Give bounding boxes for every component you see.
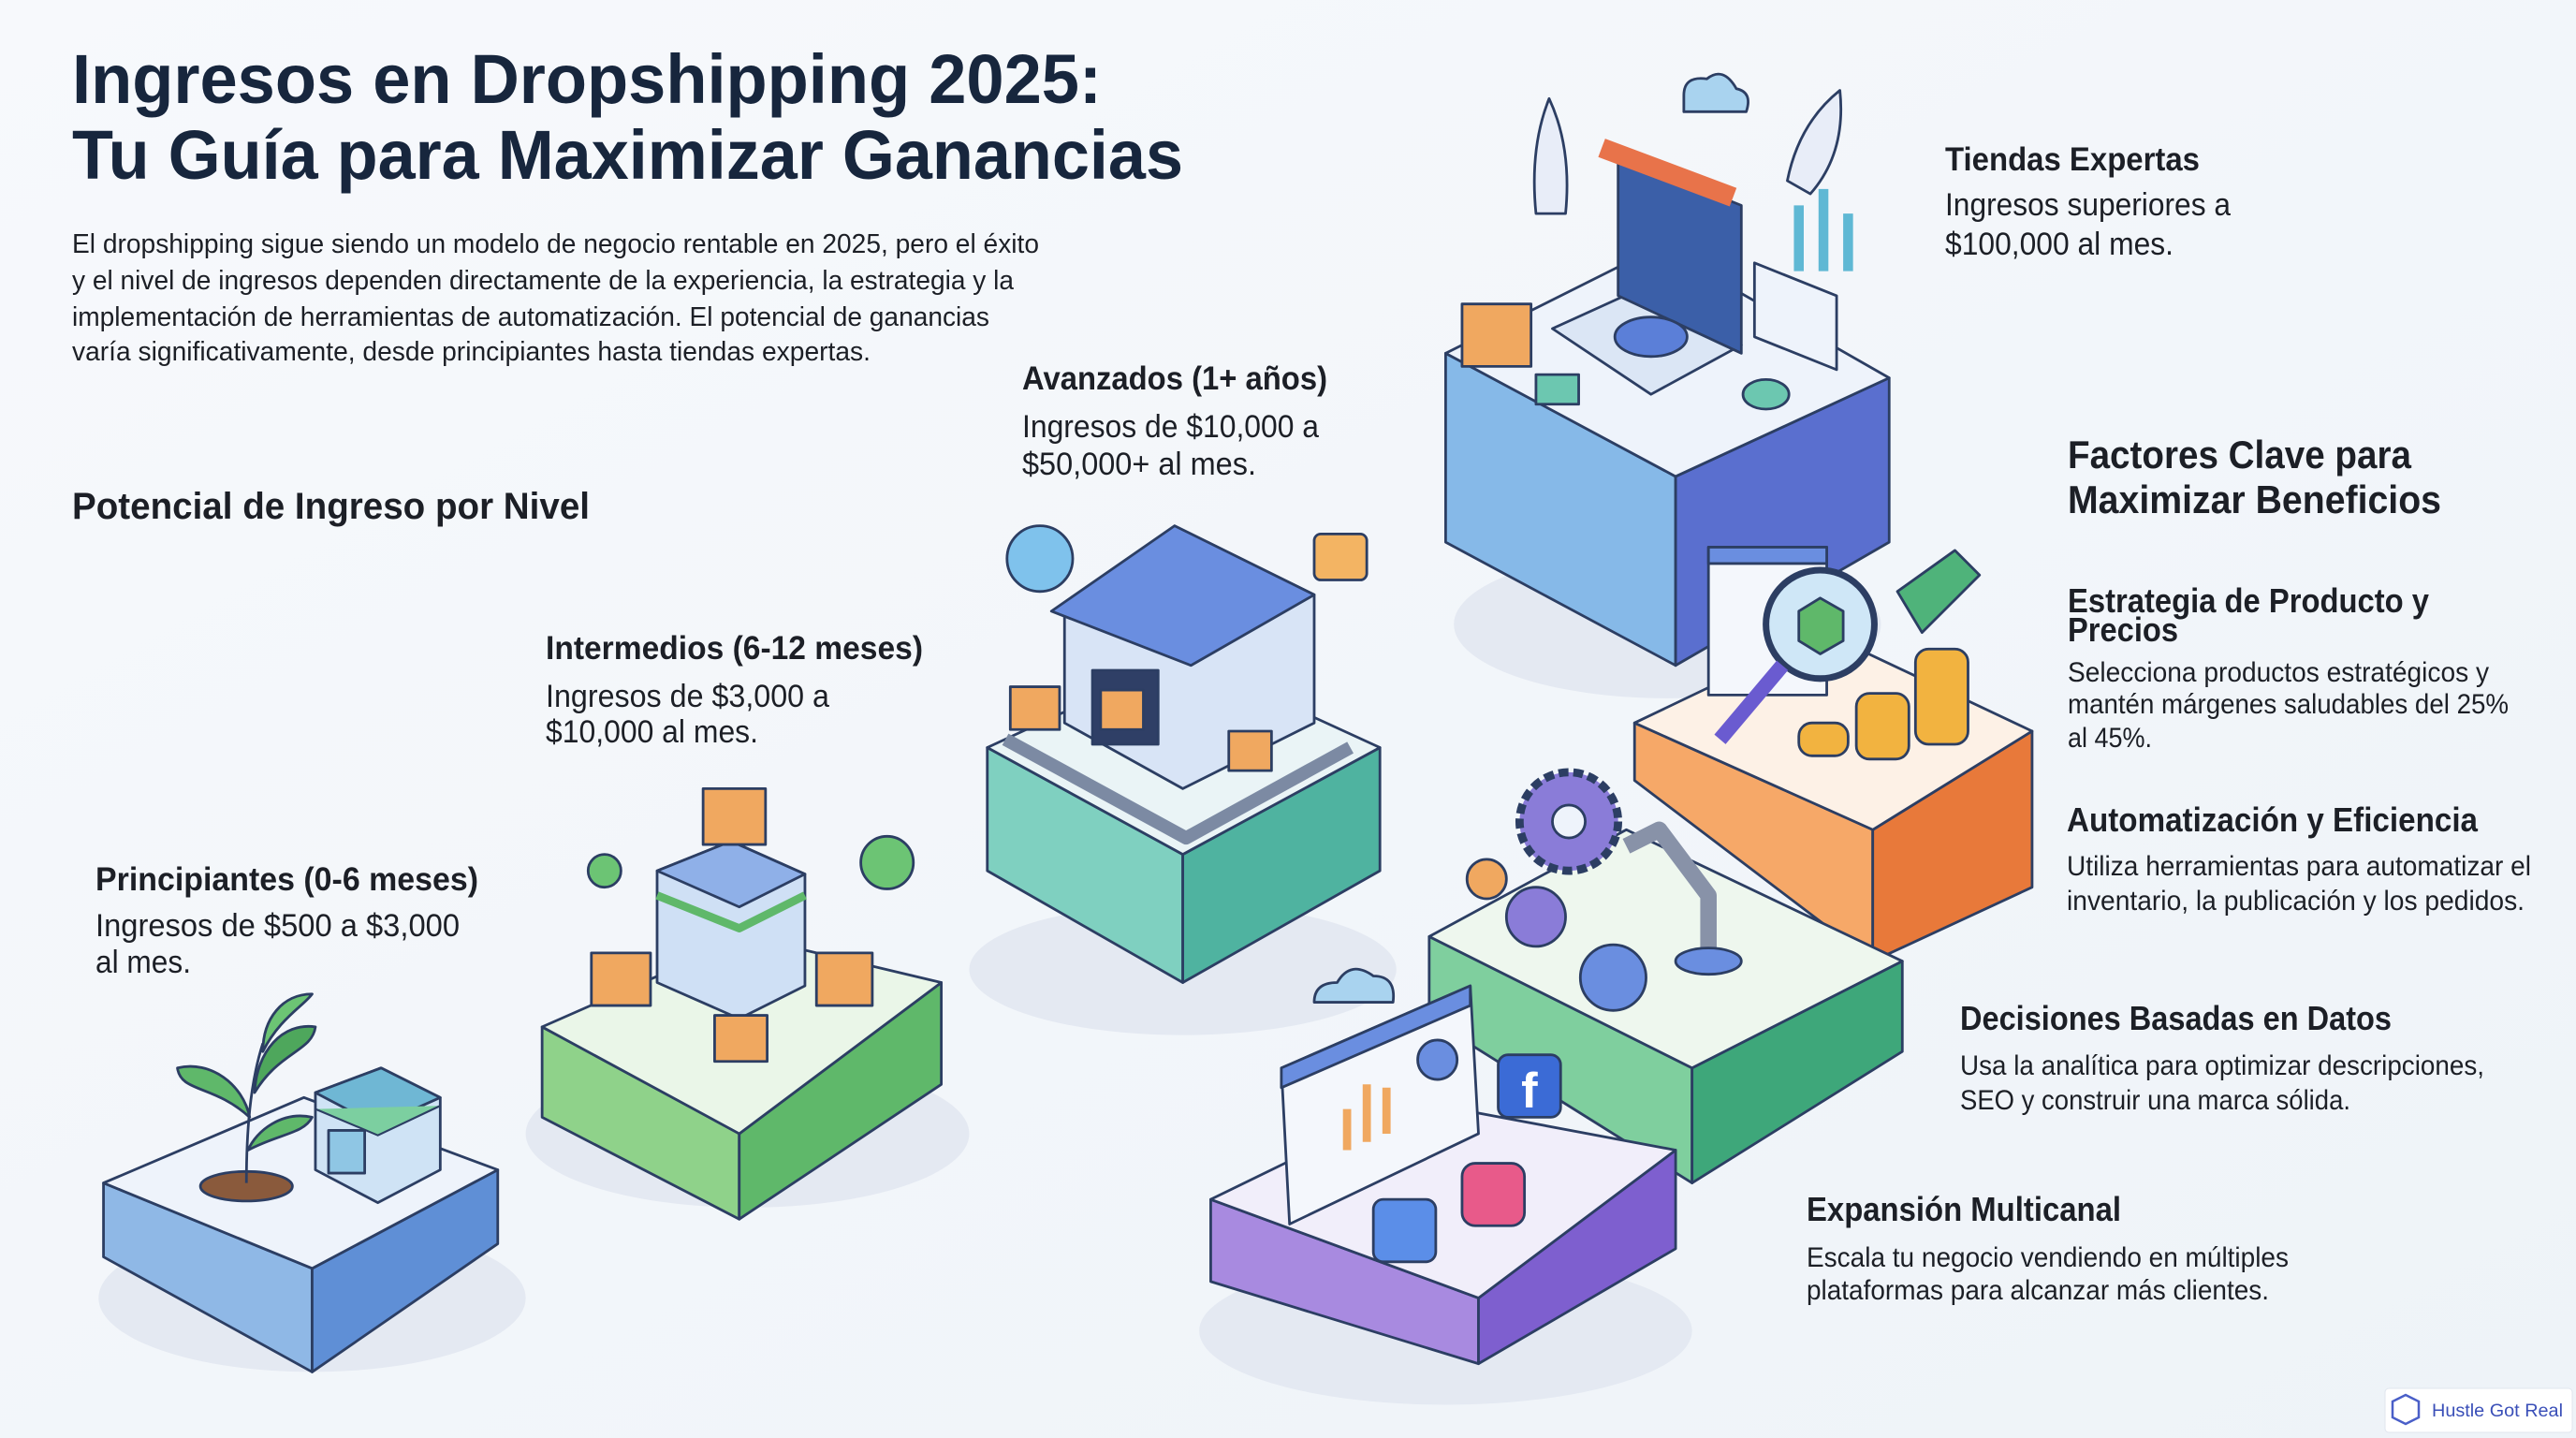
factor: estrategia: Precios <box>2068 610 2178 649</box>
level: avanzados: Ingresos de $10,000 a <box>1022 409 1319 445</box>
factor: multicanal: Escala tu negocio vendiendo en múltiples <box>1807 1242 2289 1273</box>
factor: multicanal: Expansión Multicanal <box>1807 1190 2121 1228</box>
intro paragraph: varía significativamente, desde principiantes hasta tiendas expertas. <box>72 337 871 367</box>
heading: factores clave <box>2068 433 2441 521</box>
level: tiendas expertas: Tiendas Expertas <box>1945 141 2200 178</box>
factor: multicanal <box>1807 1190 2289 1306</box>
factor: estrategia: Estrategia de Producto y <box>2068 581 2429 620</box>
icon: small store <box>315 1068 440 1203</box>
level: tiendas expertas: Ingresos superiores a <box>1945 187 2231 223</box>
subheading: Potencial de Ingreso por Nivel <box>72 486 590 527</box>
heading: factores clave: Maximizar Beneficios <box>2068 477 2441 521</box>
level: avanzados: Avanzados (1+ años) <box>1022 360 1327 397</box>
level: principiantes: al mes. <box>95 945 191 980</box>
intro paragraph: y el nivel de ingresos dependen directamente de la experiencia, la estrategia y la <box>72 266 1015 296</box>
factor: estrategia: al 45%. <box>2068 723 2152 754</box>
icon: magnifier and coins <box>1708 547 1980 759</box>
block: avanzados (teal) <box>969 526 1397 1035</box>
icon: dashboard and social <box>1281 969 1560 1262</box>
factor: datos: Decisiones Basadas en Datos <box>1960 999 2392 1037</box>
icon: plant <box>178 994 315 1201</box>
level: avanzados <box>1022 360 1327 482</box>
logo badge <box>2385 1388 2572 1432</box>
intro paragraph: implementación de herramientas de automatización. El potencial de ganancias <box>72 302 989 332</box>
level: principiantes: Ingresos de $500 a $3,000 <box>95 908 460 944</box>
level: intermedios <box>546 630 923 750</box>
factor: datos: Usa la analítica para optimizar descripciones, <box>1960 1050 2484 1081</box>
block: principiantes (blue) <box>98 994 526 1372</box>
logo badge: Hustle Got Real <box>2432 1401 2563 1421</box>
illustrations <box>98 74 2032 1405</box>
block: tiendas expertas (blue/indigo) <box>1445 74 1889 698</box>
block: automatizacion (green) <box>1429 772 1902 1183</box>
level: intermedios: $10,000 al mes. <box>546 714 758 750</box>
factor: datos <box>1960 999 2484 1116</box>
heading: factores clave: Factores Clave para <box>2068 433 2412 477</box>
title: Ingresos en Dropshipping 2025: <box>72 40 1102 118</box>
level: intermedios: Ingresos de $3,000 a <box>546 679 829 714</box>
level: principiantes: Principiantes (0-6 meses) <box>95 861 478 898</box>
factor: automatizacion: inventario, la publicación y los pedidos. <box>2067 886 2525 917</box>
icon: gears and robot arm <box>1467 772 1741 1010</box>
title <box>72 40 1183 194</box>
factor: estrategia: mantén márgenes saludables del 25% <box>2068 689 2509 720</box>
level: principiantes <box>95 861 478 980</box>
block: intermedios (green) <box>526 788 969 1219</box>
icon: warehouse <box>1005 526 1367 838</box>
icon: shop with boxes <box>588 788 914 1062</box>
intro paragraph: El dropshipping sigue siendo un modelo de negocio rentable en 2025, pero el éxito <box>72 229 1039 259</box>
factor: automatizacion: Automatización y Eficiencia <box>2067 800 2479 839</box>
intro paragraph <box>72 229 1039 367</box>
factor: multicanal: plataformas para alcanzar más clientes. <box>1807 1275 2269 1306</box>
factor: estrategia: Selecciona productos estratégicos y <box>2068 657 2489 688</box>
factor: estrategia <box>2068 581 2509 754</box>
level: tiendas expertas <box>1945 141 2231 262</box>
block: multicanal (purple) <box>1199 969 1692 1405</box>
factor: automatizacion <box>2067 800 2531 917</box>
level: intermedios: Intermedios (6-12 meses) <box>546 630 923 667</box>
icon: dashboard and social: f <box>1521 1064 1538 1119</box>
factor: automatizacion: Utiliza herramientas para automatizar el <box>2067 851 2531 882</box>
level: tiendas expertas: $100,000 al mes. <box>1945 227 2174 262</box>
factor: datos: SEO y construir una marca sólida. <box>1960 1085 2350 1116</box>
icon: laptop store with rockets <box>1462 74 1848 409</box>
block: estrategia (orange) <box>1634 547 2032 961</box>
title: Tu Guía para Maximizar Ganancias <box>72 116 1183 194</box>
level: avanzados: $50,000+ al mes. <box>1022 447 1256 482</box>
